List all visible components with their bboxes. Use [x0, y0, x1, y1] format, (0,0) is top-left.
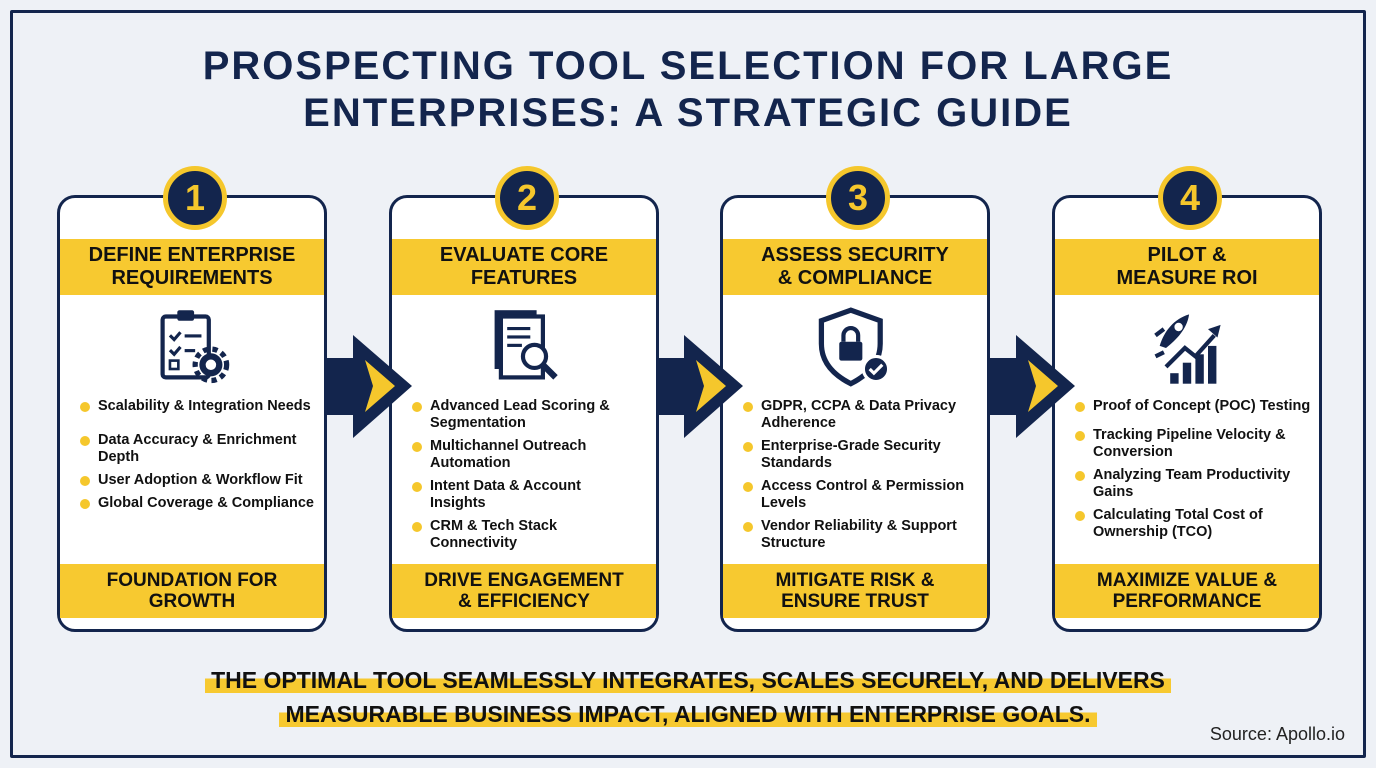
bullets 4: Analyzing Team Productivity Gains: [1093, 467, 1290, 500]
number badge 2: [495, 166, 559, 230]
heading 4: MEASURE ROI: [1116, 267, 1258, 289]
bullets 1: [80, 398, 314, 511]
bullets 4: Tracking Pipeline Velocity & Conversion: [1093, 427, 1286, 460]
title: [203, 44, 1173, 135]
heading 1: [60, 239, 324, 295]
heading 4: [1055, 239, 1319, 295]
heading 3: [723, 239, 987, 295]
footer 4: MAXIMIZE VALUE &: [1097, 570, 1277, 591]
conclusion text: THE OPTIMAL TOOL SEAMLESSLY INTEGRATES, SCALES SECURELY, AND DELIVERS: [211, 667, 1165, 693]
heading 1: REQUIREMENTS: [111, 267, 273, 289]
bullets 1: Data Accuracy & Enrichment Depth: [98, 432, 297, 465]
panel: step 1: [57, 195, 327, 632]
title: ENTERPRISES: A STRATEGIC GUIDE: [303, 91, 1073, 135]
bullets 4: Ownership (TCO): [1093, 524, 1212, 540]
panel: step 4: [1052, 195, 1322, 632]
footer 3: [723, 564, 987, 618]
footer 1: FOUNDATION FOR: [107, 570, 277, 591]
bullets 2: Intent Data & Account: [430, 478, 581, 494]
footer 2: DRIVE ENGAGEMENT: [424, 570, 624, 591]
number badge 3: [826, 166, 890, 230]
footer 3: MITIGATE RISK &: [775, 570, 935, 591]
heading 2: [392, 239, 656, 295]
number badge 2: 2: [517, 177, 537, 218]
conclusion text: MEASURABLE BUSINESS IMPACT, ALIGNED WITH ENTERPRISE GOALS.: [285, 701, 1091, 727]
bullets 1: User Adoption & Workflow Fit: [98, 472, 303, 488]
icon: document magnifier: [494, 310, 558, 380]
heading 2: FEATURES: [471, 267, 577, 289]
heading 3: ASSESS SECURITY: [761, 244, 949, 266]
bullets 3: Enterprise-Grade Security Standards: [761, 438, 941, 471]
number badge 4: [1158, 166, 1222, 230]
bullets 4: Calculating Total Cost of: [1093, 507, 1263, 523]
heading 3: & COMPLIANCE: [778, 267, 932, 289]
icon: rocket growth chart: [1154, 314, 1221, 384]
panel: step 3: [720, 195, 990, 632]
title: PROSPECTING TOOL SELECTION FOR LARGE: [203, 44, 1173, 88]
bullets 4: Proof of Concept (POC) Testing: [1093, 398, 1310, 414]
bullets 2: [412, 398, 610, 551]
panel: step 2: [389, 195, 659, 632]
bullets 1: Scalability & Integration Needs: [98, 398, 311, 414]
icon: shield lock: [818, 307, 887, 387]
arrow 3 to 4: [990, 335, 1075, 438]
footer 2: & EFFICIENCY: [458, 591, 590, 612]
bullets 4: [1075, 398, 1310, 540]
bullets 2: CRM & Tech Stack: [430, 518, 557, 534]
bullets 2: Multichannel Outreach Automation: [430, 438, 586, 471]
conclusion text: [205, 667, 1171, 727]
bullets 3: [743, 398, 964, 551]
footer 2: [392, 564, 656, 618]
icon: clipboard gear: [160, 310, 230, 384]
footer 1: [60, 564, 324, 618]
heading 2: EVALUATE CORE: [440, 244, 608, 266]
heading 4: PILOT &: [1148, 244, 1226, 266]
heading 1: DEFINE ENTERPRISE: [89, 244, 295, 266]
bullets 3: Access Control & Permission Levels: [761, 478, 964, 511]
source: Source: Apollo.io: [1210, 724, 1345, 744]
number badge 3: 3: [848, 177, 868, 218]
number badge 1: 1: [185, 177, 205, 218]
bullets 2: Advanced Lead Scoring & Segmentation: [430, 398, 610, 431]
footer 3: ENSURE TRUST: [781, 591, 929, 612]
footer 1: GROWTH: [149, 591, 235, 612]
bullets 3: GDPR, CCPA & Data Privacy Adherence: [761, 398, 956, 431]
bullets 1: Global Coverage & Compliance: [98, 495, 314, 511]
arrow 1 to 2: [327, 335, 412, 438]
footer 4: [1055, 564, 1319, 618]
number badge 4: 4: [1180, 177, 1200, 218]
arrow 2 to 3: [659, 335, 743, 438]
bullets 3: Vendor Reliability & Support Structure: [761, 518, 957, 551]
bullets 2: Insights: [430, 495, 486, 511]
number badge 1: [163, 166, 227, 230]
footer 4: PERFORMANCE: [1113, 591, 1261, 612]
bullets 2: Connectivity: [430, 535, 517, 551]
